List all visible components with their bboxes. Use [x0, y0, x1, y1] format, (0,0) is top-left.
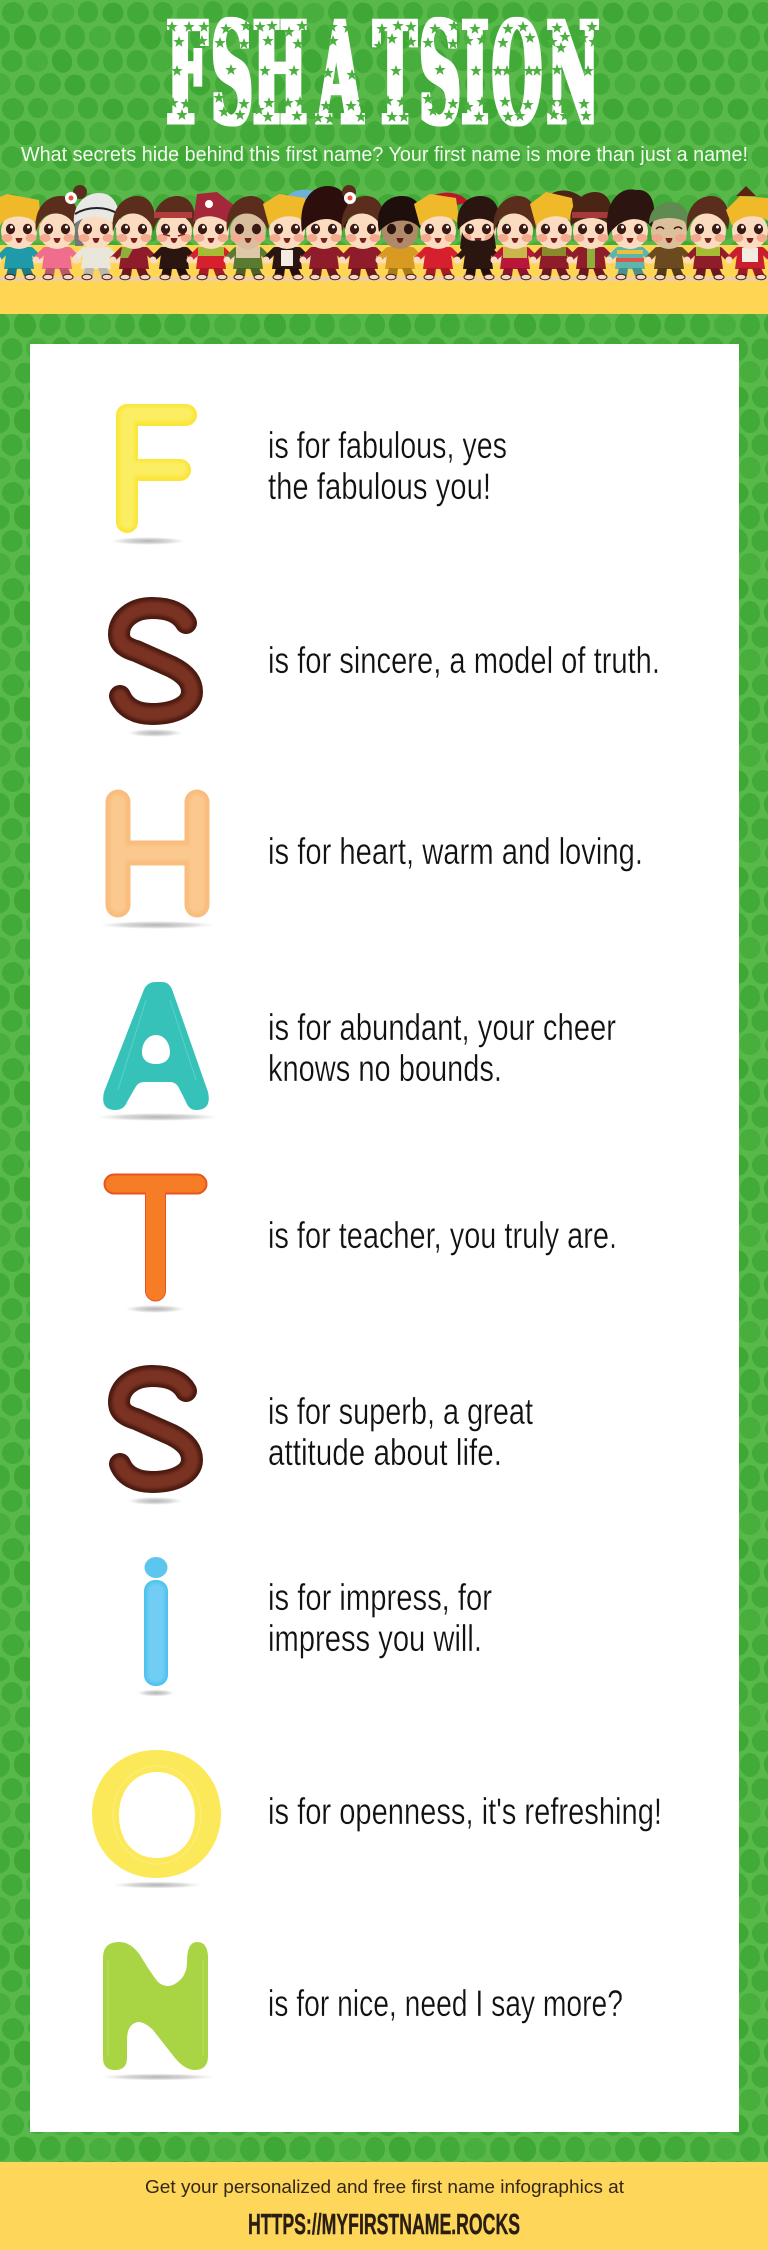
letter A: [96, 982, 220, 1121]
text: S superb: attitude about life.: [268, 1432, 502, 1473]
letter F: [110, 414, 186, 545]
text: A: knows no bounds.: [268, 1048, 502, 1089]
text: N: is for nice, need I say more?: [268, 1983, 623, 2024]
footer call to action: Get your personalized and free first name infographics at: [145, 2176, 624, 2197]
text: F: is for fabulous, yes: [268, 425, 507, 466]
text: O: is for openness, it's refreshing!: [268, 1791, 662, 1832]
text: T: is for teacher, you truly are.: [268, 1215, 617, 1256]
letter S second: [119, 1376, 192, 1505]
illustration: row of children holding hands: [0, 185, 768, 280]
text: S superb: is for superb, a great: [268, 1391, 534, 1432]
text: i: is for impress, for: [268, 1577, 492, 1618]
text: S superb: [268, 1391, 534, 1473]
panel: letters: [30, 344, 739, 2132]
letter O: [92, 1750, 221, 1888]
text: S sincere: is for sincere, a model of truth.: [268, 640, 660, 681]
yellow band: [0, 245, 768, 314]
footer: [0, 2162, 768, 2250]
letter i: [137, 1557, 175, 1696]
letter H: [99, 802, 215, 929]
text: F: the fabulous you!: [268, 466, 491, 507]
text: H: is for heart, warm and loving.: [268, 831, 643, 872]
letter N: [100, 1942, 216, 2080]
letter S: [119, 608, 192, 737]
text: i: impress you will.: [268, 1618, 482, 1659]
subtitle: What secrets hide behind this first name? Your first name is more than just a name!: [21, 144, 748, 166]
text: i: [268, 1577, 492, 1659]
text: F: [268, 425, 507, 507]
text: A: [268, 1007, 616, 1089]
footer url: HTTPS://MYFIRSTNAME.ROCKS: [248, 2209, 520, 2241]
letter T: [114, 1184, 197, 1313]
text: A: is for abundant, your cheer: [268, 1007, 616, 1048]
